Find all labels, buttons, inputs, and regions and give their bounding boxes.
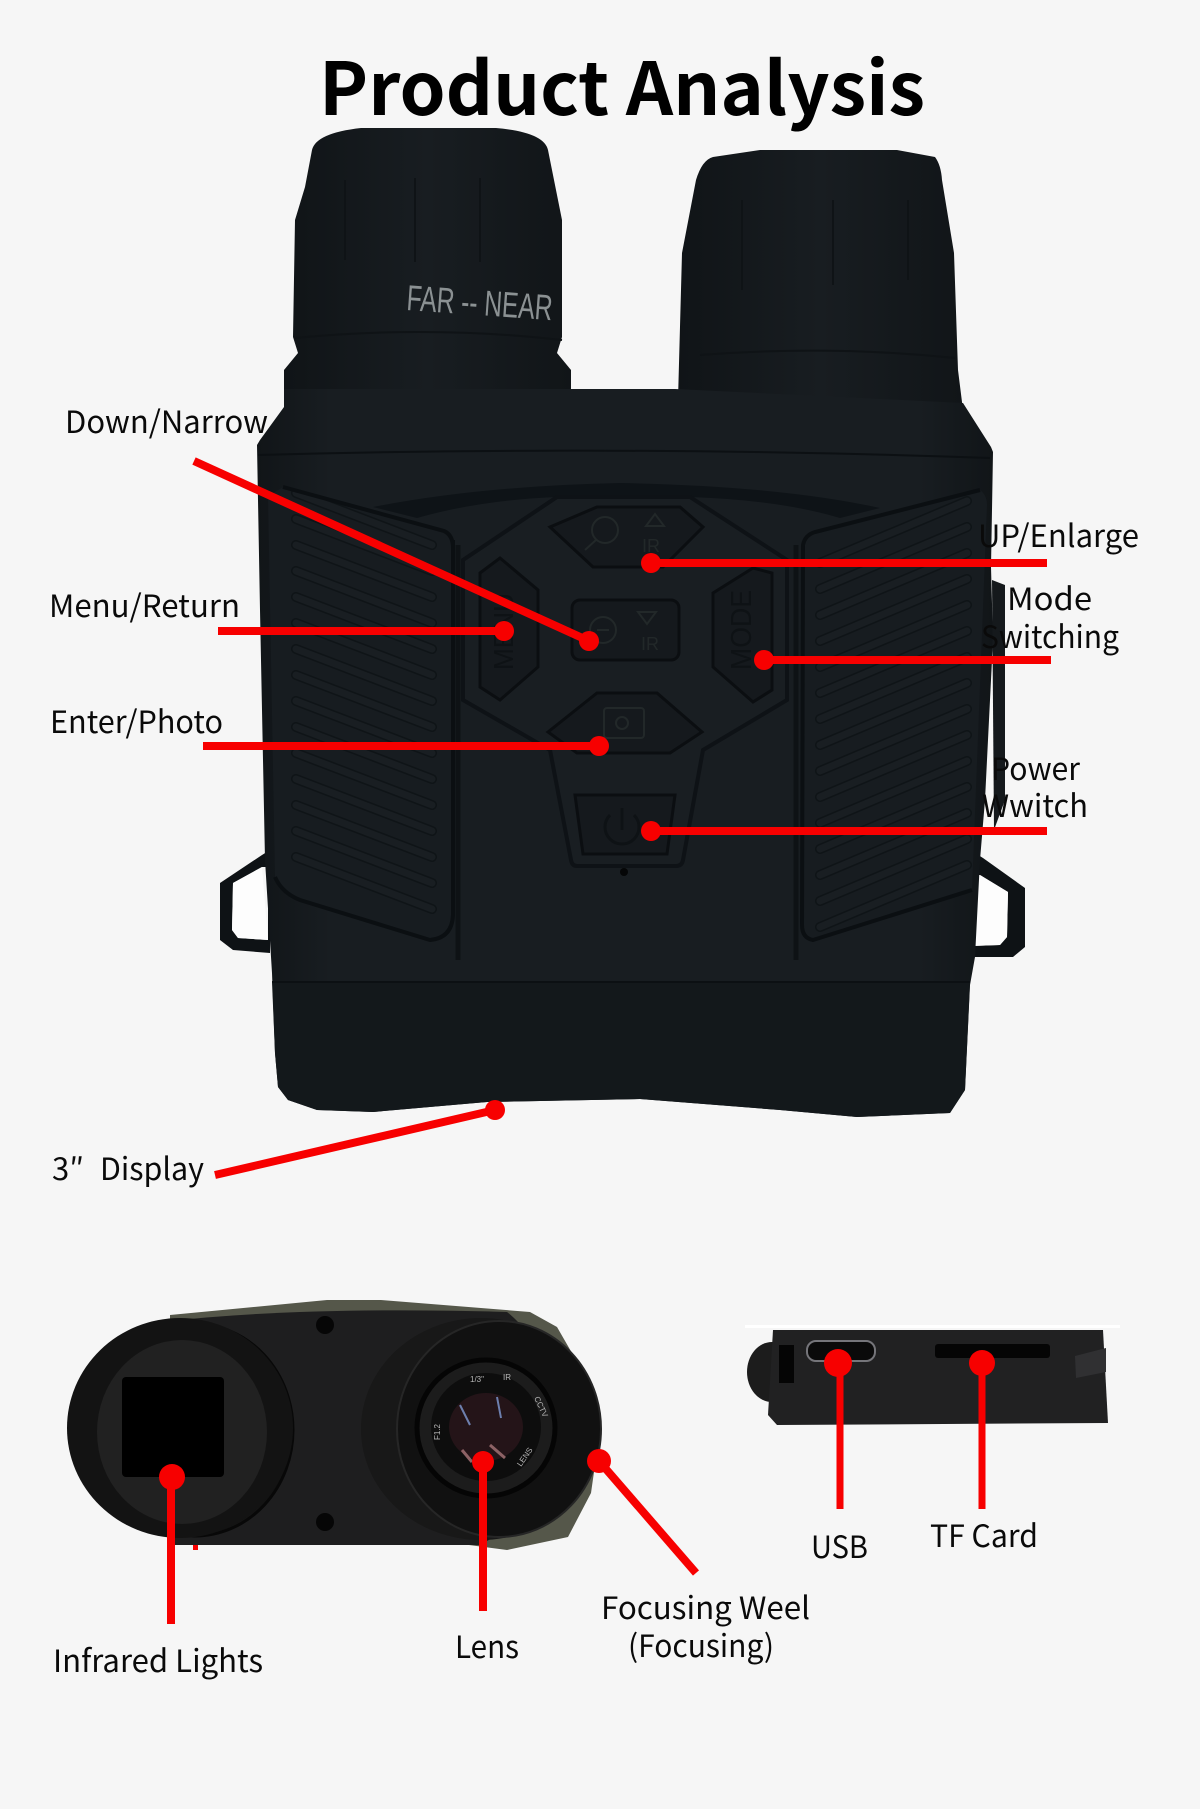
barrel grooves <box>295 178 955 358</box>
top dark arc <box>373 483 880 518</box>
button: down narrow: IR <box>641 634 659 654</box>
callout: USB: USB <box>811 1522 868 1567</box>
callout: Lens: Lens <box>455 1622 519 1667</box>
callout: TF Card: TF Card <box>930 1511 1038 1556</box>
callout: 3 inch Display <box>52 1100 505 1189</box>
right grip groove <box>794 545 798 960</box>
right tab <box>1075 1348 1106 1378</box>
main binocular device <box>220 128 1025 1117</box>
right lens assembly: 1/3" <box>470 1375 484 1384</box>
button: up enlarge <box>550 507 703 567</box>
olive shell <box>170 1300 601 1550</box>
left grip groove <box>456 545 460 960</box>
main body <box>257 389 993 1117</box>
callout: Focusing Wheel <box>587 1449 810 1666</box>
callout: 3 inch Display: 3″ <box>52 1144 84 1189</box>
callout: UP/Enlarge <box>641 511 1139 573</box>
body seam lines <box>258 451 990 982</box>
button: power <box>575 795 675 854</box>
callout: Menu/Return: Menu/Return <box>49 581 240 626</box>
callout: Focusing Wheel: (Focusing) <box>628 1621 774 1666</box>
side ports view device <box>745 1325 1120 1425</box>
right lens assembly <box>361 1318 601 1540</box>
display section <box>272 982 970 1117</box>
callout: UP/Enlarge: UP/Enlarge <box>978 511 1139 556</box>
callout: Mode Switching <box>754 574 1119 670</box>
port body <box>768 1330 1108 1425</box>
right grip panel <box>802 490 987 940</box>
right lens assembly: IR <box>503 1373 511 1382</box>
highlight strip <box>745 1325 1120 1328</box>
callout: Enter/Photo: Enter/Photo <box>50 697 223 742</box>
button: enter photo <box>548 693 702 753</box>
left lug opening <box>232 867 268 940</box>
button: menu <box>480 558 538 700</box>
front view device <box>67 1300 601 1550</box>
button: mode: MODE <box>726 590 758 670</box>
right lug opening <box>972 875 1008 946</box>
callout: 3 inch Display: Display <box>100 1144 204 1189</box>
callout: Enter/Photo <box>50 697 609 756</box>
callout: Infrared Lights: Infrared Lights <box>53 1636 263 1681</box>
left infrared housing <box>67 1318 293 1538</box>
small red tick <box>193 1545 198 1550</box>
callout: USB <box>811 1349 868 1567</box>
right eyepiece barrel <box>678 150 963 410</box>
callout: TF Card <box>930 1350 1038 1556</box>
indicator hole <box>620 868 628 876</box>
right lens assembly: F1.2 <box>433 1423 442 1440</box>
button: mode <box>713 568 772 702</box>
mount holes <box>316 1316 334 1531</box>
right lens assembly: LENS <box>515 1446 535 1468</box>
control panel outline <box>463 497 787 866</box>
rear knob <box>747 1342 797 1402</box>
callout: Power Wwitch: Wwitch <box>982 781 1088 826</box>
callout: Mode Switching: Mode <box>1007 574 1092 619</box>
callout: Infrared Lights <box>53 1464 263 1681</box>
callout: Down/Narrow <box>65 397 599 651</box>
focus scale label: FAR -- NEAR <box>405 277 554 328</box>
callout: Mode Switching: Switching <box>981 612 1119 657</box>
title: Product Analysis <box>319 31 925 137</box>
callout: Lens <box>455 1451 519 1667</box>
front plate <box>160 1310 560 1545</box>
callout: Down/Narrow: Down/Narrow <box>65 397 268 442</box>
right lens assembly: CCTV <box>532 1395 550 1419</box>
icon: left strap lug <box>220 850 270 953</box>
callout: Menu/Return <box>49 581 514 641</box>
side button <box>992 580 1005 830</box>
callout: Focusing Wheel: Focusing Weel <box>601 1583 810 1628</box>
callout: Power Wwitch <box>641 744 1088 841</box>
usb port <box>807 1341 875 1361</box>
icon: right strap lug <box>972 853 1025 957</box>
callout: Power Wwitch: Power <box>991 744 1081 789</box>
left grip panel <box>268 487 453 940</box>
vent slot <box>779 1345 794 1383</box>
tf card slot <box>935 1344 1050 1358</box>
button: menu: MENU <box>488 593 519 670</box>
button: up enlarge: IR <box>642 536 660 556</box>
button: down narrow <box>572 600 679 660</box>
left eyepiece barrel <box>284 128 571 400</box>
